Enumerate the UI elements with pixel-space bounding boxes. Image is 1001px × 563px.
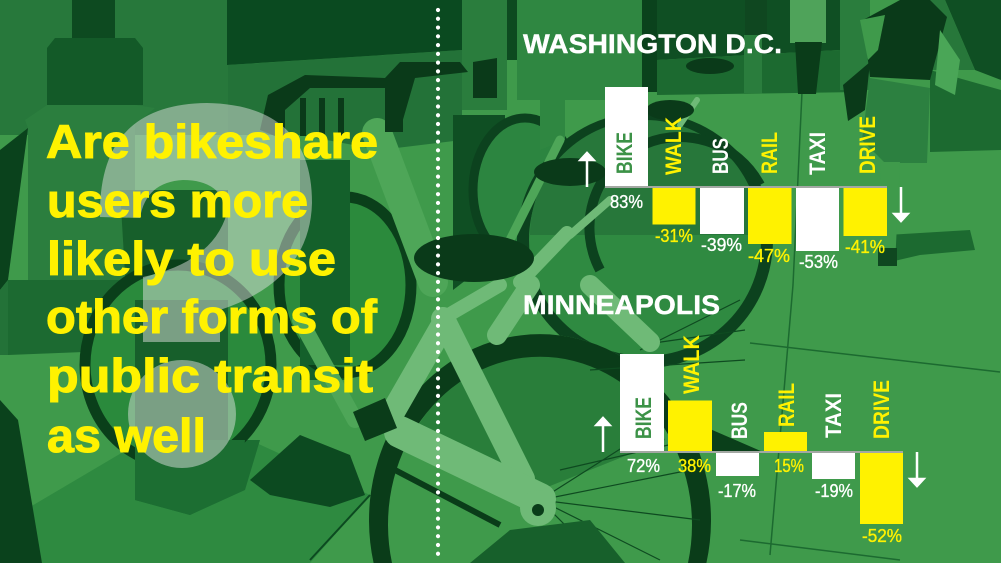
wall and street behind <box>0 0 228 135</box>
pedestrians <box>744 0 960 266</box>
bar chart: Washington D.C.: TAXI <box>805 132 830 175</box>
saddles and handlebars <box>260 58 734 282</box>
arrow up: Minneapolis <box>596 418 610 452</box>
bar chart: Minneapolis: 38% <box>678 456 711 476</box>
docks <box>120 190 228 440</box>
hub and pedal <box>520 490 556 526</box>
bar chart: Minneapolis: -19% <box>815 481 853 501</box>
front wheel <box>369 334 711 563</box>
question mark dot <box>128 360 236 468</box>
bar chart: Washington D.C.: -39% <box>701 235 742 255</box>
dotted divider <box>436 10 440 556</box>
arrow down: Washington D.C. <box>894 187 908 221</box>
bar chart: Minneapolis: 15% <box>774 456 804 476</box>
bar chart: Minneapolis: BIKE <box>631 397 656 439</box>
bar chart: Minneapolis: -52% <box>862 526 902 546</box>
bar chart: Washington D.C.: RAIL <box>757 132 782 174</box>
bar chart: Washington D.C.: -53% <box>799 252 838 272</box>
middle wheel with logo <box>523 118 767 362</box>
bar chart: Washington D.C.: BIKE <box>612 132 637 174</box>
bar chart: Washington D.C.: -31% <box>655 226 693 246</box>
arrow up: Washington D.C. <box>580 153 594 187</box>
stone pillar <box>72 0 115 38</box>
bar chart: Washington D.C.: WALK <box>661 117 686 175</box>
floor zones <box>0 355 135 563</box>
heading: Minneapolis: MINNEAPOLIS <box>523 290 720 320</box>
headline question: Are bikeshare <box>46 115 378 168</box>
bar chart: Washington D.C.: -47% <box>748 246 790 266</box>
dark dock and wheel behind the divider <box>453 115 505 290</box>
bar chart: Minneapolis: -17% <box>718 481 756 501</box>
sidewalk seam <box>740 92 1000 560</box>
bar chart: Minneapolis: BUS <box>727 402 752 439</box>
rear wheels <box>85 265 271 465</box>
bar chart: Minneapolis: RAIL <box>774 383 799 427</box>
bike frames <box>300 100 697 499</box>
shadows <box>887 230 975 262</box>
headline question: as well <box>47 409 206 462</box>
bar chart: Washington D.C.: 83% <box>610 192 643 212</box>
headline question: users more <box>47 174 308 227</box>
bar chart: Minneapolis: WALK <box>679 335 704 394</box>
shadow under bike <box>470 520 625 563</box>
bar chart: Washington D.C. <box>605 87 887 272</box>
headline question: likely to use <box>47 232 336 285</box>
headline question <box>46 115 378 462</box>
arrow down: Minneapolis <box>910 452 924 486</box>
bar chart: Minneapolis <box>620 335 903 546</box>
bar chart: Washington D.C.: BUS <box>708 138 733 174</box>
headline question: other forms of <box>46 290 377 343</box>
bar chart: Washington D.C.: -41% <box>845 237 885 257</box>
bar chart: Minneapolis: 72% <box>627 456 660 476</box>
bar chart: Minneapolis: TAXI <box>821 393 846 438</box>
building at right <box>930 70 1001 152</box>
bar chart: Washington D.C.: DRIVE <box>855 116 880 174</box>
question mark watermark <box>100 103 312 342</box>
headline question: public transit <box>47 349 373 402</box>
heading: Washington D.C.: WASHINGTON D.C. <box>523 29 782 59</box>
bar chart: Minneapolis: DRIVE <box>869 380 894 439</box>
